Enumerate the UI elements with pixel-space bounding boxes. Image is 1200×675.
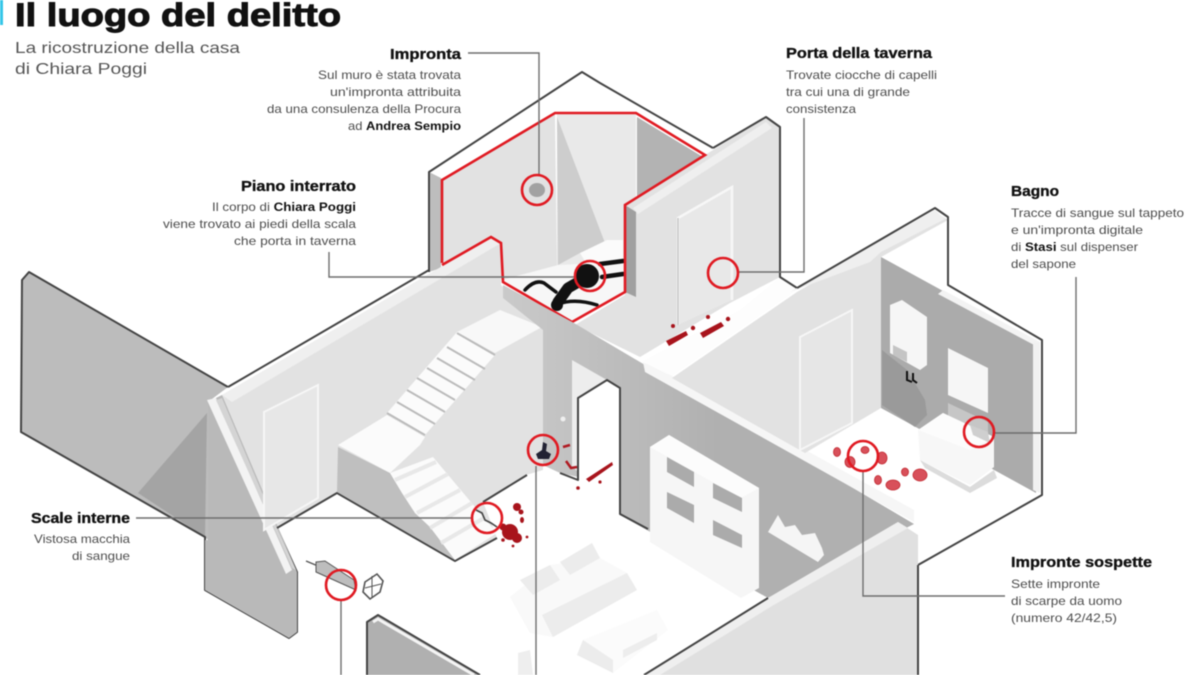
sink cabinet [948, 403, 988, 437]
callout: Porta della taverna: tra cui una di grande [786, 85, 910, 99]
footprints [834, 446, 927, 490]
callout: Piano interrato [163, 178, 356, 248]
callout: Porta della taverna: Trovate ciocche di capelli [786, 68, 937, 82]
callout: Impronta: un'impronta attribuita [330, 85, 461, 99]
callout: Porta della taverna: Porta della taverna [786, 45, 933, 62]
red marker circles [326, 175, 994, 600]
crack on stair wall [476, 510, 497, 527]
callout: Impronte sospette [1011, 554, 1152, 625]
tool on the floor [306, 561, 383, 599]
callout: Impronte sospette: Impronte sospette [1011, 554, 1152, 571]
callout: Bagno: e un'impronta digitale [1011, 223, 1143, 237]
callout: Scale interne: Vistosa macchia [34, 532, 130, 546]
callout: Impronta [267, 46, 462, 133]
fingerprint mark on the wall [529, 183, 545, 197]
callout: Impronta: ad Andrea Sempio [348, 119, 461, 133]
callout: Bagno: di Stasi sul dispenser [1011, 240, 1138, 254]
right room wall [672, 208, 1042, 675]
bathroom fixtures [890, 300, 997, 493]
callout: Impronta: Sul muro è stata trovata [318, 68, 461, 82]
callout: Piano interrato: Piano interrato [241, 178, 356, 195]
front left wall [367, 615, 480, 675]
callout: Bagno: Bagno [1011, 183, 1059, 200]
leader lines [136, 53, 1076, 675]
callout: Scale interne: Scale interne [31, 510, 130, 527]
long left wall [205, 113, 705, 638]
callout: Bagno [1011, 183, 1184, 271]
soap dispenser detail [970, 425, 990, 443]
middle wall [503, 285, 914, 598]
callout: Impronta: Impronta [390, 46, 462, 63]
lower stairs [337, 447, 497, 560]
callout: Scale interne [31, 510, 130, 563]
taverna door wall [575, 117, 797, 376]
sofas and table [510, 543, 668, 675]
door [264, 385, 318, 530]
callout: Bagno: Tracce di sangue sul tappeto [1011, 206, 1184, 220]
callout: Piano interrato: che porta in taverna [234, 234, 356, 248]
callout: Bagno: del sapone [1011, 257, 1076, 271]
blood stains [500, 315, 730, 547]
left wall [21, 272, 297, 638]
subtitle: La ricostruzione della casa [15, 40, 240, 57]
callout: Impronte sospette: Sette impronte [1011, 577, 1100, 591]
accent bar [0, 0, 3, 25]
callout: Porta della taverna: consistenza [786, 102, 856, 116]
isometric house [21, 72, 1042, 675]
upper stairs [338, 310, 542, 473]
callout: Impronte sospette: (numero 42/42,5) [1011, 611, 1117, 625]
back room [429, 72, 713, 322]
boiler [890, 300, 927, 370]
callout: Porta della taverna [786, 45, 937, 116]
callout: Piano interrato: viene trovato ai piedi della scala [163, 217, 356, 231]
callout: Impronta: da una consulenza della Procura [267, 102, 461, 116]
hammer weapon mark [536, 442, 551, 459]
shelving unit [650, 435, 759, 598]
body silhouette [525, 261, 623, 311]
subtitle: di Chiara Poggi [15, 61, 147, 78]
window [948, 348, 988, 413]
wall shelf [768, 515, 824, 562]
callout: Impronte sospette: di scarpe da uomo [1011, 594, 1122, 608]
front right wall [644, 522, 918, 675]
callout: Scale interne: di sangue [72, 549, 130, 563]
callout: Piano interrato: Il corpo di Chiara Poggi [212, 200, 356, 214]
subtitle [15, 40, 240, 78]
